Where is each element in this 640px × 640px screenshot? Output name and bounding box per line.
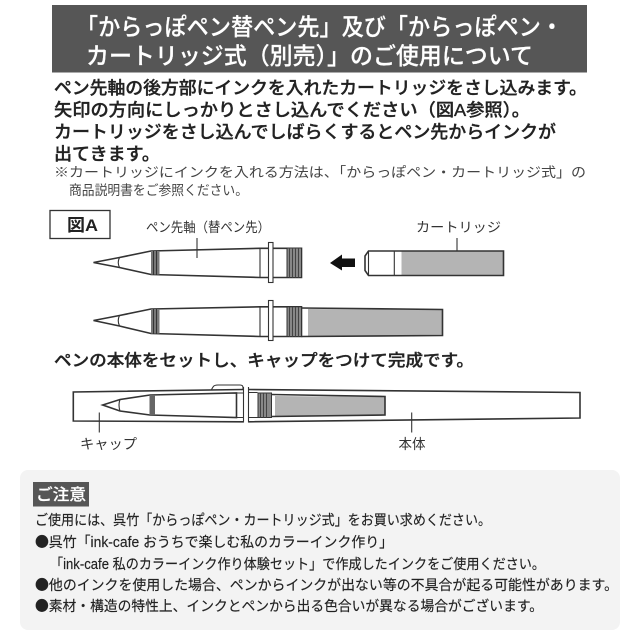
arrow: insert direction (330, 254, 355, 270)
text block: caution list (35, 512, 618, 616)
label: caution tag: ご注意 (36, 486, 86, 504)
label: body (398, 412, 426, 452)
panel: notes (20, 470, 620, 630)
text block: footnote (54, 165, 586, 198)
heading: title: カートリッジ式（別売）」のご使用について (86, 43, 533, 69)
text block: caution list: ●呉竹「ink-cafe おうちで楽しむ私のカラーインク作り」 (35, 531, 393, 552)
panel: header banner (52, 5, 587, 72)
label: figure A: 図A (67, 216, 98, 235)
text block: caution list: ●素材・構造の特性上、インクとペンから出る色合いが異なる場合がございます。 (35, 595, 543, 616)
text block: instructions (54, 78, 587, 164)
text block: footnote: 商品説明書をご参照ください。 (69, 183, 248, 198)
label: body: 本体 (398, 436, 426, 452)
label: pen nib shaft (146, 220, 270, 258)
text block: instructions: カートリッジをさし込んでしばらくするとペン先からインクが (54, 122, 557, 142)
icon: cartridge (365, 251, 504, 276)
text block: instructions: 出てきます。 (54, 144, 160, 164)
text block: footnote: ※カートリッジにインクを入れる方法は、「からっぽペン・カートリッジ式」の (54, 165, 586, 180)
text block: instructions: ペン先軸の後方部にインクを入れたカートリッジをさし込みます。 (54, 78, 587, 98)
text block: caution list: 「ink-cafe 私のカラーインク作り体験セット」で作成したインクをご使用ください。 (50, 556, 545, 573)
heading: title: 「からっぽペン替ペン先」及び「からっぽペン・ (76, 14, 563, 40)
text: assembly instruction: ペンの本体をセットし、キャップをつけて完成です。 (54, 351, 474, 370)
label: cap: キャップ (80, 436, 137, 452)
heading: title (76, 14, 563, 69)
label: caution tag (33, 482, 89, 506)
icon: capped pen (73, 385, 580, 422)
icon: assembled pen with cartridge (94, 300, 442, 340)
label: pen nib shaft: ペン先軸（替ペン先） (146, 220, 270, 235)
label: cartridge: カートリッジ (416, 220, 501, 235)
label: figure A (50, 210, 110, 238)
text block: caution list: ●他のインクを使用した場合、ペンからインクが出ない等の不具合が起る可能性があります。 (35, 574, 618, 595)
text block: caution list: ご使用には、呉竹「からっぽペン・カートリッジ式」をお買い求めください。 (35, 512, 491, 529)
label: cartridge (416, 220, 501, 258)
text block: instructions: 矢印の方向にしっかりとさし込んでください（図A参照）。 (54, 100, 530, 120)
label: cap (80, 412, 137, 452)
icon: nib shaft (94, 242, 302, 282)
